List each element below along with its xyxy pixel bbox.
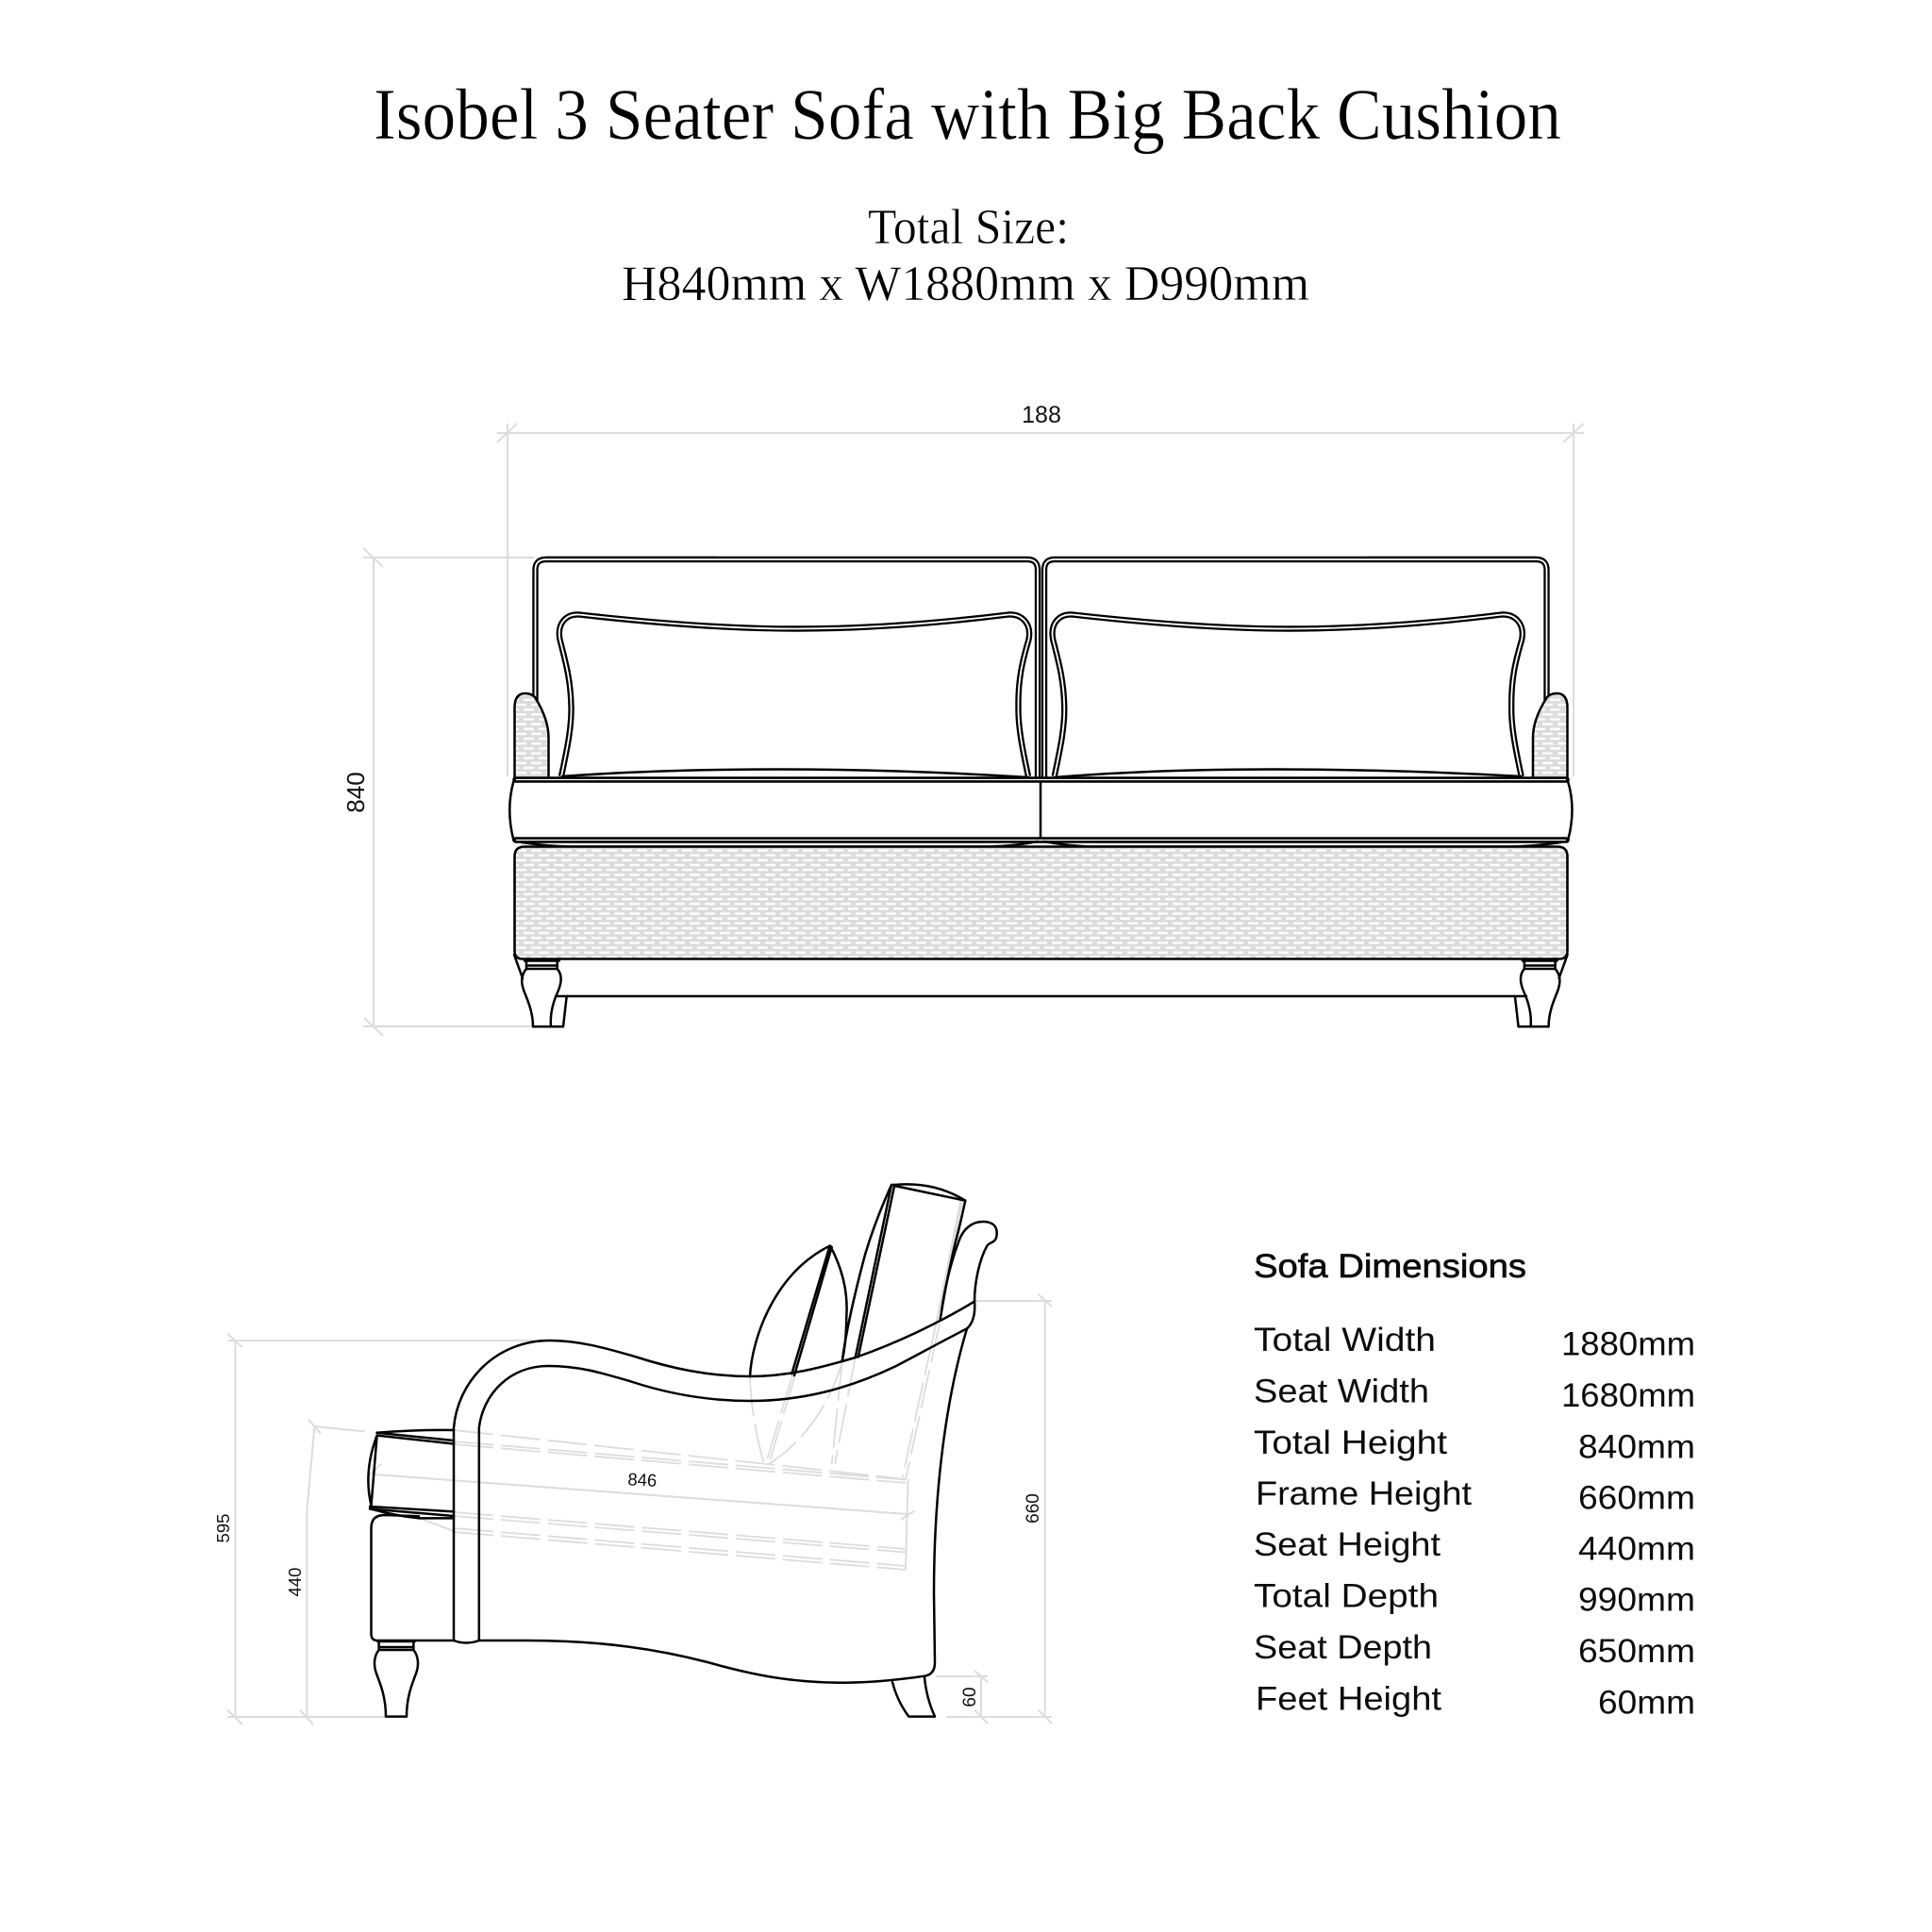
row: total depth: 990mm: [1578, 1581, 1695, 1619]
upholstered base with woven fabric: [515, 847, 1568, 958]
seat cushion crown curves: [562, 770, 1522, 777]
dimensions table: [1254, 1248, 1695, 1721]
row: total height: Total Height: [1254, 1424, 1447, 1461]
row: seat width: [1254, 1374, 1695, 1414]
seat cushion front: [368, 1430, 454, 1518]
seat height line 440: [300, 1420, 365, 1724]
row: seat width: 1680mm: [1561, 1377, 1695, 1414]
scatter cushion right: [1053, 614, 1523, 776]
row: frame height: 660mm: [1578, 1479, 1695, 1517]
seat cushions: [509, 779, 1572, 847]
row: total width: 1880mm: [1561, 1326, 1695, 1362]
table heading: Sofa Dimensions: [1254, 1248, 1526, 1285]
row: feet height: Feet Height: [1256, 1681, 1441, 1717]
value 60: 60: [960, 1687, 980, 1707]
left arm: [515, 693, 549, 779]
feet height line 60: [936, 1671, 988, 1724]
row: total width: [1254, 1322, 1695, 1362]
row: seat depth: Seat Depth: [1254, 1629, 1432, 1666]
value 595: 595: [213, 1514, 233, 1542]
front panel: [372, 1515, 454, 1641]
value 440: 440: [285, 1568, 305, 1596]
overall side height line 595: [227, 1334, 550, 1724]
value 846: 846: [627, 1469, 658, 1491]
side view dimension lines: [213, 1294, 1052, 1724]
frame height line 660: [946, 1294, 1052, 1724]
sofa front view: [509, 557, 1572, 1026]
row: seat depth: 650mm: [1578, 1633, 1695, 1670]
row: seat height: 440mm: [1578, 1530, 1695, 1568]
row: feet height: 60mm: [1598, 1685, 1695, 1721]
hidden seat cushion lines: [419, 1430, 908, 1570]
scatter cushion left: [559, 614, 1029, 776]
row: seat height: [1254, 1526, 1695, 1568]
row: frame height: Frame Height: [1256, 1475, 1472, 1512]
height dimension value: 840: [341, 772, 370, 813]
width dimension line: [497, 424, 1584, 776]
lower rail: [556, 995, 1526, 997]
row: total height: [1254, 1424, 1695, 1466]
sofa side view: [368, 1184, 997, 1717]
row: seat width: Seat Width: [1254, 1374, 1429, 1409]
row: frame height: [1256, 1475, 1695, 1517]
big back cushion: [842, 1184, 965, 1361]
seat depth line 846: [367, 1464, 915, 1520]
arm frame band: [454, 1302, 974, 1643]
row: total depth: Total Depth: [1254, 1577, 1439, 1615]
row: total depth: [1254, 1577, 1695, 1619]
width dimension value: 188: [1022, 402, 1061, 428]
height dimension line: [363, 548, 534, 1036]
right arm: [1533, 693, 1568, 779]
hidden back cushion lines: [750, 1201, 962, 1479]
subtitle: total size label: Total Size:: [868, 200, 1069, 255]
title: Isobel 3 Seater Sofa with Big Back Cushion: [374, 74, 1561, 155]
value 660: 660: [1024, 1493, 1043, 1524]
left leg: [514, 955, 567, 1026]
back foot: [892, 1677, 935, 1717]
row: seat height: Seat Height: [1254, 1526, 1441, 1563]
row: feet height: [1256, 1681, 1695, 1721]
sofa back and underside: [479, 1328, 967, 1683]
rolled back scroll: [941, 1222, 997, 1311]
row: total width: Total Width: [1254, 1322, 1436, 1358]
right leg: [1515, 955, 1568, 1026]
front view dimension lines: [341, 402, 1584, 1036]
subtitle: total size values: H840mm x W1880mm x D990mm: [622, 257, 1309, 311]
row: seat depth: [1254, 1629, 1695, 1670]
row: total height: 840mm: [1578, 1428, 1695, 1466]
small scatter cushion: [750, 1245, 847, 1376]
front turned leg: [375, 1641, 418, 1717]
back cushions: [536, 557, 1547, 779]
